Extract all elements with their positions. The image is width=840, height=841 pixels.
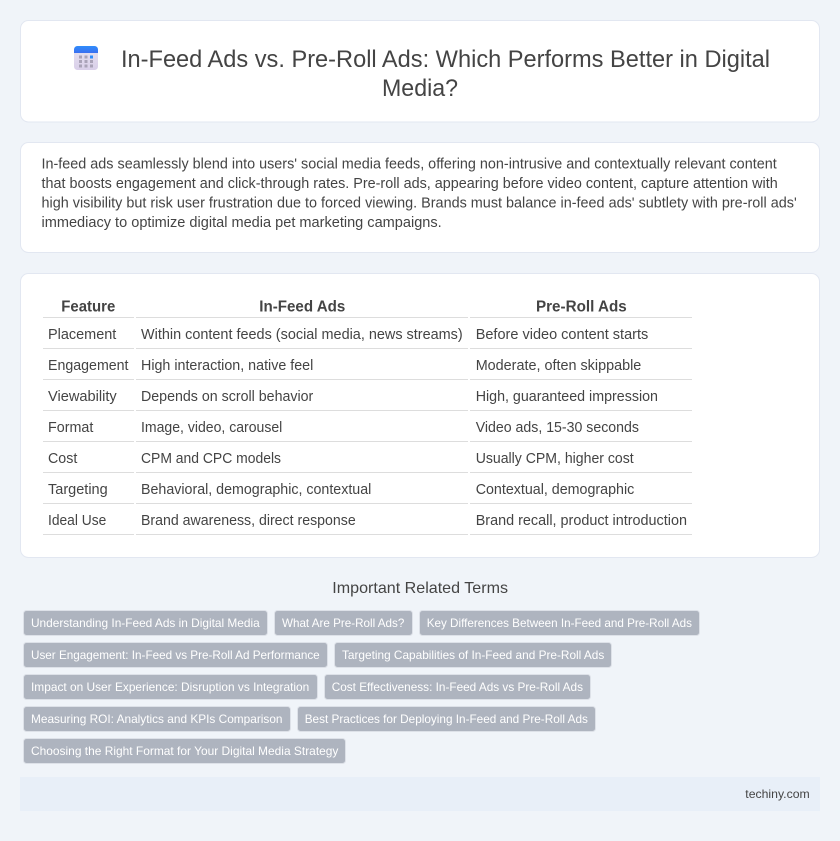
table header: Pre-Roll Ads xyxy=(536,298,627,316)
tag: key differences: Key Differences Between In-Feed and Pre-Roll Ads xyxy=(427,616,692,630)
row: format xyxy=(43,420,692,442)
row: cost: CPM and CPC models xyxy=(141,451,281,467)
row: targeting: Contextual, demographic xyxy=(476,482,634,498)
tag: choosing the right format: Choosing the Right Format for Your Digital Media Strategy xyxy=(31,744,338,758)
heading: important related terms: Important Related Terms xyxy=(332,580,508,597)
row: cost: Cost xyxy=(48,451,77,467)
tag: measuring roi xyxy=(24,706,290,732)
row: engagement: Moderate, often skippable xyxy=(476,358,641,374)
tag: impact on user experience: Impact on User Experience: Disruption vs Integration xyxy=(31,680,309,694)
tag: cost effectiveness xyxy=(324,674,590,700)
table header: Feature xyxy=(61,298,115,316)
tag: understanding in-feed ads xyxy=(24,610,268,636)
row: format: Video ads, 15-30 seconds xyxy=(476,420,639,436)
row: targeting: Targeting xyxy=(48,482,108,498)
tag: key differences xyxy=(420,610,700,636)
row: placement xyxy=(43,327,692,349)
row: engagement: High interaction, native feel xyxy=(141,358,313,374)
tag: what are pre-roll ads: What Are Pre-Roll Ads? xyxy=(282,616,405,630)
row: engagement xyxy=(43,358,692,380)
tag: targeting capabilities xyxy=(334,642,612,668)
title: In-Feed Ads vs. Pre-Roll Ads: Which Performs Better in Digital xyxy=(121,46,770,73)
tag: what are pre-roll ads xyxy=(274,610,412,636)
row: viewability: High, guaranteed impression xyxy=(476,389,658,405)
row: ideal use xyxy=(43,513,692,535)
panel: comparison table xyxy=(20,274,820,558)
intro paragraph xyxy=(42,155,797,231)
row: viewability: Viewability xyxy=(48,389,117,405)
row: format: Format xyxy=(48,420,93,436)
row: targeting: Behavioral, demographic, contextual xyxy=(141,482,371,498)
intro paragraph: In-feed ads seamlessly blend into users' social media feeds, offering non-intrusive and contextually relevant content xyxy=(42,155,777,172)
tag: user engagement xyxy=(24,642,328,668)
icon: calendar xyxy=(74,46,98,70)
panel: introduction xyxy=(20,142,820,252)
row: placement: Within content feeds (social media, news streams) xyxy=(141,327,463,343)
row: engagement: Engagement xyxy=(48,358,128,374)
table header xyxy=(43,298,692,318)
row: cost: Usually CPM, higher cost xyxy=(476,451,634,467)
tag: targeting capabilities: Targeting Capabilities of In-Feed and Pre-Roll Ads xyxy=(342,648,604,662)
intro paragraph: high visibility but risk user frustration due to forced viewing. Brands must balance in-feed ads' subtlety with pre-roll ads' xyxy=(42,194,797,211)
row: placement: Placement xyxy=(48,327,116,343)
table header: In-Feed Ads xyxy=(259,298,345,316)
tag: user engagement: User Engagement: In-Feed vs Pre-Roll Ad Performance xyxy=(31,648,320,662)
tag: impact on user experience xyxy=(24,674,318,700)
panel: related terms xyxy=(24,580,700,764)
intro paragraph: immediacy to optimize digital media pet marketing campaigns. xyxy=(42,214,442,231)
tag: choosing the right format xyxy=(24,738,346,764)
tag: measuring roi: Measuring ROI: Analytics and KPIs Comparison xyxy=(31,712,282,726)
row: cost xyxy=(43,451,692,473)
row: placement: Before video content starts xyxy=(476,327,648,343)
footer xyxy=(20,777,820,811)
row: ideal use: Brand awareness, direct response xyxy=(141,513,356,529)
footer: techiny.com xyxy=(745,787,810,801)
tag: cost effectiveness: Cost Effectiveness: In-Feed Ads vs Pre-Roll Ads xyxy=(332,680,583,694)
title: Media? xyxy=(382,75,458,102)
tag: best practices xyxy=(298,706,596,732)
row: ideal use: Brand recall, product introduction xyxy=(476,513,687,529)
tag: understanding in-feed ads: Understanding In-Feed Ads in Digital Media xyxy=(31,616,260,630)
tag: best practices: Best Practices for Deploying In-Feed and Pre-Roll Ads xyxy=(305,712,588,726)
row: targeting xyxy=(43,482,692,504)
row: format: Image, video, carousel xyxy=(141,420,282,436)
panel: header xyxy=(20,20,820,122)
row: viewability xyxy=(43,389,692,411)
title xyxy=(121,46,770,102)
row: viewability: Depends on scroll behavior xyxy=(141,389,313,405)
row: ideal use: Ideal Use xyxy=(48,513,106,529)
intro paragraph: that boosts engagement and click-through rates. Pre-roll ads, appearing before video content, capture attention with xyxy=(42,175,778,192)
